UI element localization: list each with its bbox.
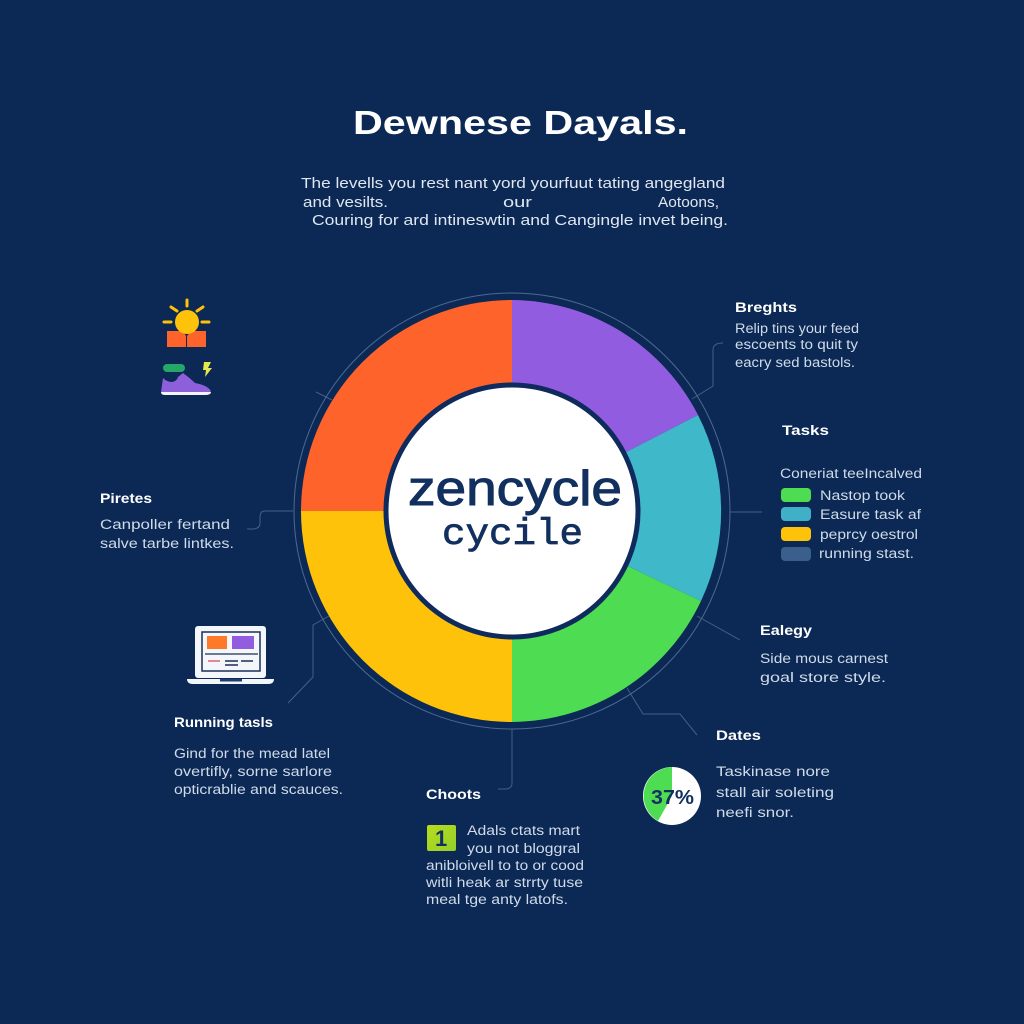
label: Pirates: salve tarbe lintkes. [100,536,234,551]
legend: teal [781,507,921,522]
label: Pirates: Piretes [100,490,152,506]
label: Dates [716,727,834,820]
label: Dates: stall air soleting [716,785,834,800]
label: Choots: Adals ctats mart [467,823,580,838]
label: Pirates: Canpoller fertand [100,517,230,532]
center hub [386,385,638,637]
legend: slate [781,546,914,561]
connector lines [247,343,762,789]
label: Breghts: Breghts [735,299,797,315]
label: Choots [425,786,584,907]
label: Choots: meal tge anty latofs. [426,892,568,907]
label: Breghts [735,299,859,370]
label: Dates: neefi snor. [716,805,794,820]
legend: green [781,488,905,503]
icon: sneaker with bolt [161,362,212,395]
label: Breghts: Relip tins your feed [735,321,859,336]
icon: sun over book [164,300,209,347]
label: Tasks with legend [780,422,922,561]
segment: yellow [301,511,512,722]
label: Choots: you not bloggral [467,841,580,856]
title: Dewnese Dayals. [353,104,688,141]
mini pie: 37% [643,767,701,825]
label: Ealegy: Side mous carnest [760,651,888,666]
intro text block: and vesilts. [303,194,388,211]
label: Breghts: escoents to quit ty [735,337,858,352]
intro text block [301,175,728,229]
segment: teal [512,415,721,601]
legend: yellow [781,527,918,542]
label: Running tasks [174,714,343,797]
label: Choots: Choots [426,786,481,802]
label: Choots: anibloivell to to or cood [426,858,584,873]
label: Running tasks: Gind for the mead latel [174,746,330,761]
label: Tasks with legend: Coneriat teeIncalved [780,466,922,481]
badge [427,825,456,851]
label: Ealegy: Ealegy [760,622,812,638]
label: Dates: Dates [716,727,761,743]
label: Breghts: eacry sed bastols. [735,355,855,370]
label: Dates: Taskinase nore [716,764,830,779]
mini pie: 37%: 37% [651,787,694,809]
label: Choots: witli heak ar strrty tuse [425,875,583,890]
segment: purple [512,300,698,511]
segment: orange [301,300,512,511]
intro text block: Couring for ard intineswtin and Cangingle invet being. [312,212,728,229]
hub title: zencycle [408,462,622,516]
label: Tasks with legend: Tasks [782,422,829,438]
label: Running tasks: Running tasls [174,714,273,730]
label: Pirates [100,490,234,551]
intro text block: Aotoons, [658,194,719,211]
legend: green: Nastop took [820,488,905,503]
legend: teal: Easure task af [820,507,921,522]
intro text block: The levells you rest nant yord yourfuut tating angegland [301,175,725,192]
icon: laptop [187,626,274,684]
donut chart [301,300,721,722]
label: Running tasks: overtifly, sorne sarlore [174,764,332,779]
intro text block: our [503,194,532,211]
outer thin ring [294,293,730,729]
label: Ealegy [760,622,888,685]
badge: 1 [435,826,447,851]
hub subtitle: cycile [442,514,583,556]
label: Running tasks: opticrablie and scauces. [174,782,343,797]
legend: yellow: peprcy oestrol [820,527,918,542]
legend: slate: running stast. [819,546,914,561]
label: Ealegy: goal store style. [760,670,886,685]
segment: green [512,511,701,722]
